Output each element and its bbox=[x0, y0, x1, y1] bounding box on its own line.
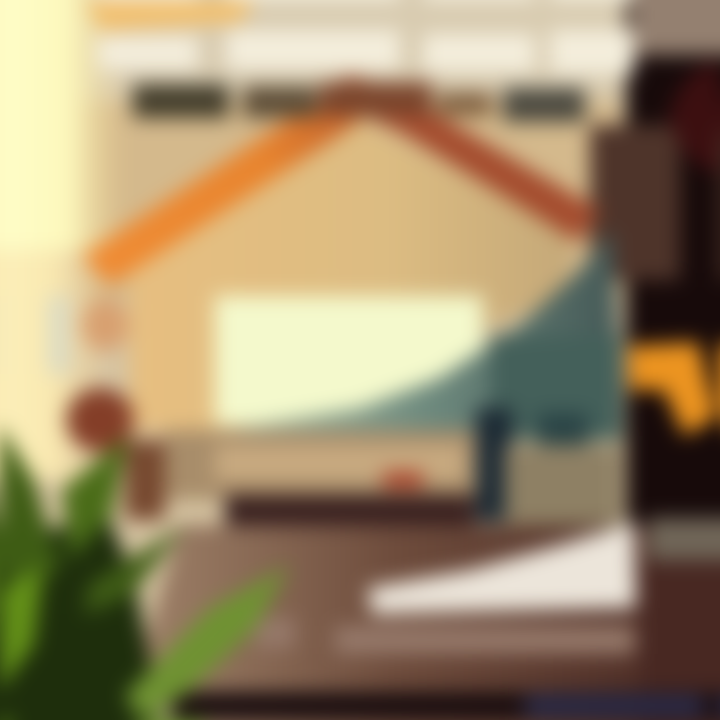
panel: bright window bbox=[215, 296, 483, 425]
heading: dark subtitle bar bbox=[133, 82, 585, 122]
panel: dark right side bbox=[590, 0, 720, 560]
panel: bottom dark strip bbox=[170, 692, 720, 720]
icon: roof left orange bbox=[82, 82, 388, 286]
icon: orange glow on right bbox=[628, 342, 716, 436]
panel: counter bbox=[165, 408, 620, 530]
panel: left figure bbox=[48, 296, 165, 520]
panel: floor bbox=[130, 518, 720, 692]
heading: white title bar bbox=[98, 30, 634, 74]
text block: lower caption bbox=[255, 618, 635, 654]
panel: bright left light bbox=[0, 0, 255, 480]
panel: house wall bbox=[105, 115, 575, 430]
icon: roof right red-brown bbox=[345, 74, 600, 242]
chart: rising teal hill bbox=[235, 230, 622, 440]
icon: green plant bbox=[0, 425, 290, 720]
panel: white callout shape bbox=[368, 522, 636, 614]
